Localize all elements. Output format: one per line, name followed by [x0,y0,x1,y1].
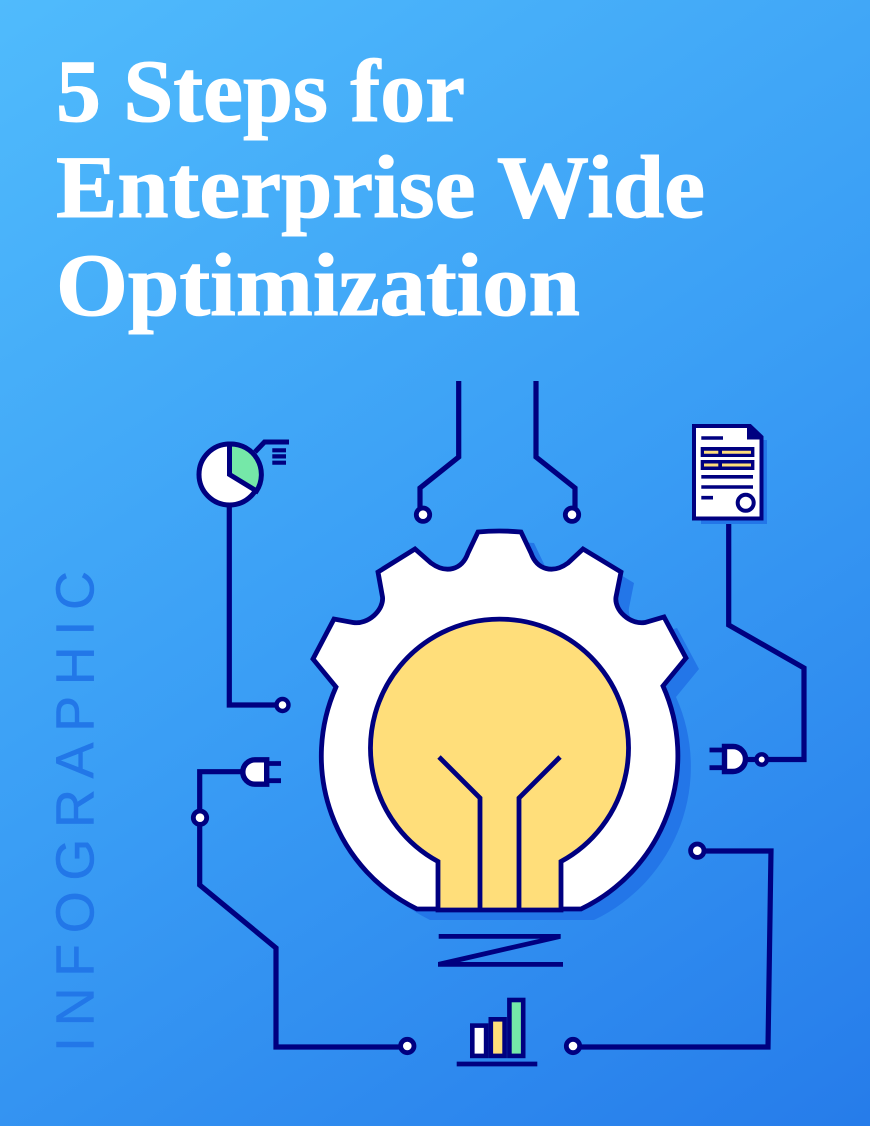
vertical label: INFOGRAPHIC: INFOGRAPHIC [46,571,106,1052]
wire terminals [193,508,767,1053]
icon: document [694,425,767,524]
icon: right plug [710,746,746,772]
icon: left plug [243,760,281,784]
title: 5 Steps for [56,43,465,141]
circuit wires [200,381,804,1047]
gear [313,531,686,909]
title: Optimization [56,237,580,335]
title [56,43,705,335]
title: Enterprise Wide [56,139,705,237]
gear shadow [326,542,699,920]
light bulb [370,619,628,910]
bulb base [438,934,563,967]
icon: bar chart [457,1000,537,1064]
icon: pie chart [199,442,289,505]
